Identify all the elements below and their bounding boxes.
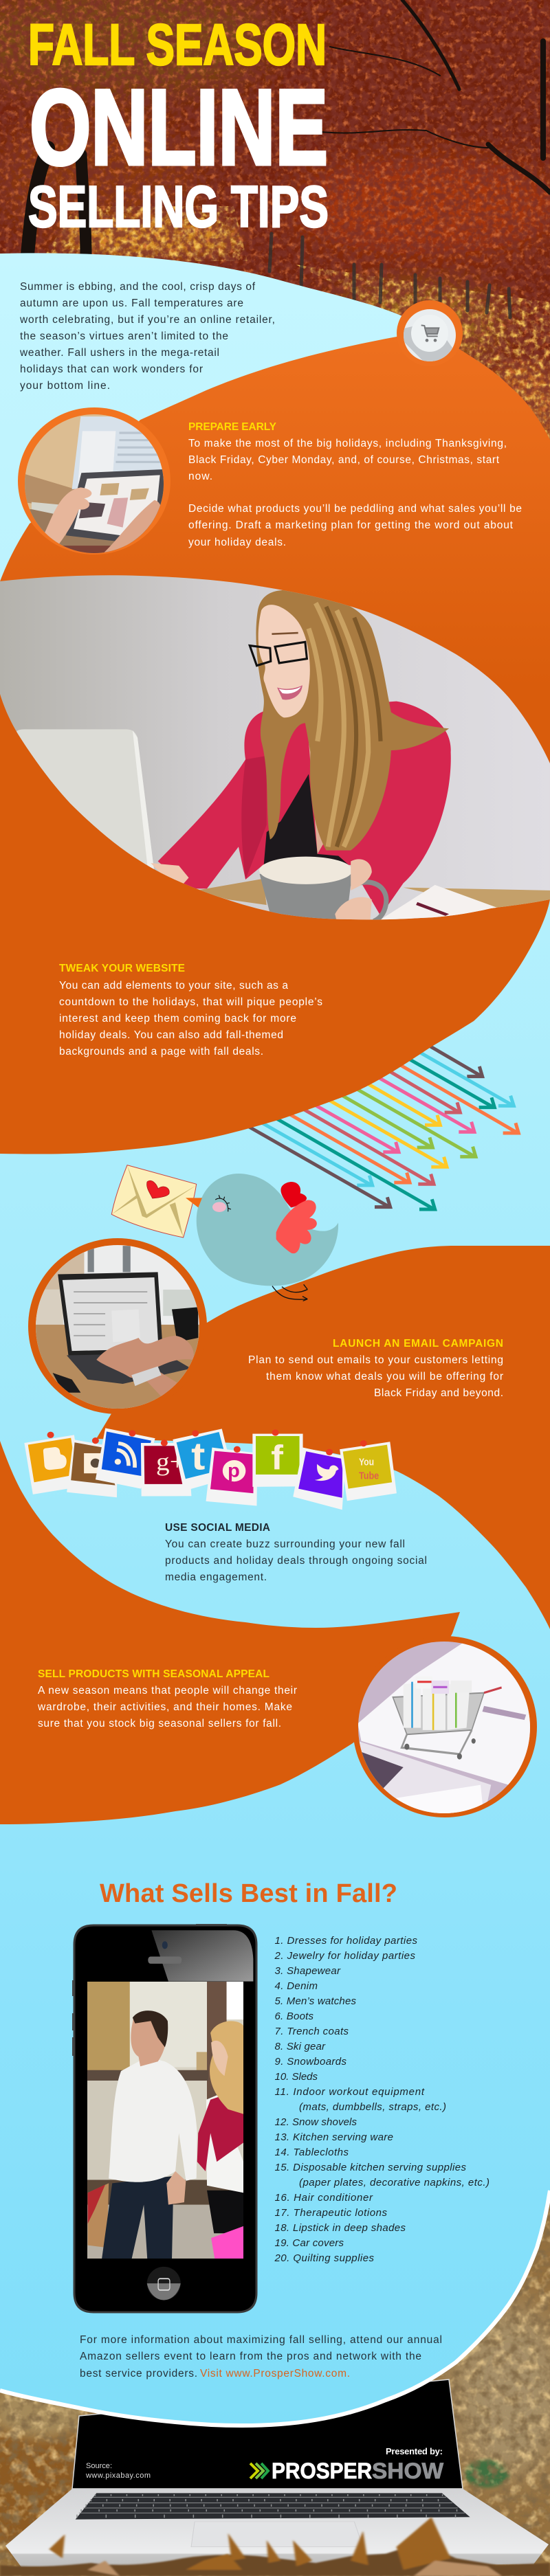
photo: woman at laptop with mug [0,570,550,927]
card: Facebook: f [271,1438,284,1477]
list: best sellers in fall: 5. Men’s watches [275,1995,356,2007]
section: prepare early: your holiday deals. [188,537,286,548]
section: sell products with seasonal appeal [37,1668,297,1729]
section: prepare early: PREPARE EARLY [188,421,277,433]
title: ONLINE [30,68,328,188]
touchpad [191,2522,363,2547]
gloss [151,1930,253,1982]
list: best sellers in fall: 6. Boots [275,2011,314,2022]
woman [207,2191,243,2233]
glasses [250,642,307,666]
title [28,12,329,240]
list: best sellers in fall: 11. Indoor workout equipment [275,2086,425,2098]
photo: tablet shopping [18,407,170,560]
list: best sellers in fall: (paper plates, decorative napkins, etc.) [299,2177,490,2188]
section: use social media: USE SOCIAL MEDIA [165,1522,270,1534]
title: SELLING TIPS [28,175,329,240]
section: tweak your website: TWEAK YOUR WEBSITE [59,963,185,974]
panel: middle orange swoosh [96,1246,550,1629]
photo: laptop email inbox [28,1238,207,1414]
section: tweak your website [59,963,322,1057]
panel: upper orange swoosh [0,323,550,1154]
hair [256,590,449,851]
white footer curve [0,2191,550,2426]
section: tweak your website: countdown to the holidays, that will pique people’s [59,996,322,1008]
list: best sellers in fall: 19. Car covers [275,2237,344,2249]
list: best sellers in fall: 2. Jewelry for holiday parties [274,1950,415,1962]
section: launch an email campaign: Plan to send out emails to your customers letting [248,1354,503,1366]
section: use social media: You can create buzz surrounding your new fall [165,1538,405,1550]
shopping bags [88,2183,109,2248]
list: best sellers in fall: 7. Trench coats [275,2026,349,2037]
section: prepare early: To make the most of the big holidays, including Thanksgiving, [188,438,507,449]
list: best sellers in fall: 20. Quilting supplies [274,2252,374,2264]
icon: shopping cart badge [397,300,463,366]
card: YouTube: Tube [359,1470,379,1481]
section: prepare early [188,421,522,548]
panel: lower orange swoosh [0,1441,460,1824]
list: best sellers in fall: 10. Sleds [275,2071,318,2083]
blouse [264,774,351,866]
background: fallen leaves photo and laptop [0,2171,550,2576]
list: best sellers in fall: (mats, dumbbells, straps, etc.) [299,2101,446,2113]
text block: intro: the season’s virtues aren’t limited to the [20,331,228,342]
section: use social media [165,1522,427,1583]
list: best sellers in fall: 8. Ski gear [275,2041,326,2052]
keyboard [0,2493,550,2576]
section: sell products with seasonal appeal: wardrobe, their activities, and their homes. Make [37,1701,292,1713]
icon: smartphone with shoppers photo [72,1924,256,2312]
list: best sellers in fall: 1. Dresses for holiday parties [275,1935,418,1947]
list: best sellers in fall: 9. Snowboards [275,2056,346,2068]
heading: what sells best in fall: What Sells Best in Fall? [100,1879,397,1908]
source credit: www.pixabay.com [85,2472,151,2480]
cart [393,1693,484,1734]
card: YouTube: You [359,1457,374,1468]
card: Twitter [293,1448,346,1510]
text block: intro: worth celebrating, but if you’re an online retailer, [19,314,275,326]
section: launch an email campaign: Black Friday and beyond. [374,1387,503,1399]
section: sell products with seasonal appeal: A new season means that people will change their [38,1685,297,1696]
section: tweak your website: holiday deals. You can also add fall-themed [59,1029,283,1041]
text block: closing call to action: best service providers. [80,2368,197,2379]
card: Blogger [24,1435,82,1494]
section: use social media: products and holiday deals through ongoing social [165,1555,427,1567]
logo: presented by Prosper Show [250,2446,444,2483]
section: sell products with seasonal appeal: sure that you stock big seasonal sellers for fall. [38,1718,281,1729]
list: best sellers in fall: 14. Tablecloths [275,2147,349,2158]
section: sell products with seasonal appeal: SELL PRODUCTS WITH SEASONAL APPEAL [38,1668,270,1680]
list: best sellers in fall: 3. Shapewear [275,1965,341,1977]
logo: presented by Prosper Show: Presented by: [386,2446,443,2456]
list: best sellers in fall: 13. Kitchen serving ware [275,2131,393,2143]
text block: intro: autumn are upon us. Fall temperatures are [20,298,243,309]
background: autumn forest photo [0,0,550,460]
card: YouTube [340,1442,397,1501]
paper and pen [381,885,500,919]
card: Pinterest: p [228,1459,240,1481]
section: tweak your website: interest and keep them coming back for more [59,1013,296,1024]
card: Google Plus: g+ [156,1448,185,1476]
envelope [111,1165,197,1237]
source credit: Source: [86,2462,112,2470]
text block: intro: weather. Fall ushers in the mega-retail [19,347,219,359]
card: Pinterest [206,1448,258,1506]
laptop deck [6,2489,549,2567]
list: best sellers in fall [274,1935,490,2264]
list: best sellers in fall: 15. Disposable kitchen serving supplies [275,2162,466,2173]
text block: intro [19,281,275,392]
bird [186,1174,338,1301]
section: prepare early: Decide what products you’ll be peddling and what sales you’ll be [188,503,522,515]
face [258,605,310,717]
photo: shopping cart with gifts [353,1636,537,1820]
list: best sellers in fall: 18. Lipstick in deep shades [275,2222,406,2234]
section: tweak your website: You can add elements to your site, such as a [59,980,288,992]
list: best sellers in fall: 16. Hair conditioner [275,2192,373,2204]
mouth [277,685,302,699]
section: launch an email campaign [248,1338,503,1399]
section: prepare early: now. [188,471,212,482]
icons: social media polaroids [24,1428,397,1510]
text block: intro: Summer is ebbing, and the cool, crisp days of [20,281,256,293]
man [102,2176,174,2259]
arrows [239,1039,518,1209]
pins [47,1429,367,1455]
jacket [158,702,451,916]
section: launch an email campaign: them know what deals you will be offering for [266,1371,503,1382]
desk [197,879,267,905]
text block: closing call to action: Visit www.ProsperShow.com. [200,2368,350,2379]
list: best sellers in fall: 4. Denim [275,1980,318,1992]
text block: closing call to action: For more information about maximizing fall selling, attend our annual [80,2334,442,2346]
pink bag [211,2226,243,2259]
text block: closing call to action [80,2334,442,2379]
section: tweak your website: backgrounds and a page with fall deals. [59,1046,263,1057]
source credit [85,2462,151,2480]
hand on keyboard [151,863,188,885]
tree trunks and branches [28,0,550,317]
logo: presented by Prosper Show: PROSPER [272,2459,372,2483]
card: Instagram [67,1440,118,1497]
icon: envelope and bird [111,1165,338,1301]
foreground leaves [0,2517,550,2576]
section: use social media: media engagement. [165,1571,267,1583]
laptop lid [16,729,154,872]
section: prepare early: Black Friday, Cyber Monday, and, of course, Christmas, start [188,454,500,466]
title: FALL SEASON [28,12,327,77]
section: prepare early: offering. Draft a marketing plan for getting the word out about [188,519,514,531]
card: Facebook [252,1434,303,1487]
logo: presented by Prosper Show: SHOW [372,2459,444,2483]
laptop screen [72,2379,463,2489]
section: launch an email campaign: LAUNCH AN EMAIL CAMPAIGN [333,1338,503,1349]
green plant [465,2460,509,2487]
mug [260,874,351,919]
card: Tumblr: t [191,1435,205,1478]
text block: intro: holidays that can work wonders for [20,363,203,375]
text block: intro: your bottom line. [20,380,110,392]
list: best sellers in fall: 17. Therapeutic lotions [275,2207,388,2219]
list: best sellers in fall: 12. Snow shovels [275,2116,358,2128]
card: Google Plus [141,1443,191,1497]
card: Tumblr [173,1429,234,1491]
card: RSS [96,1428,155,1489]
text block: closing call to action: Amazon sellers event to learn from the pros and network with the [80,2351,421,2362]
